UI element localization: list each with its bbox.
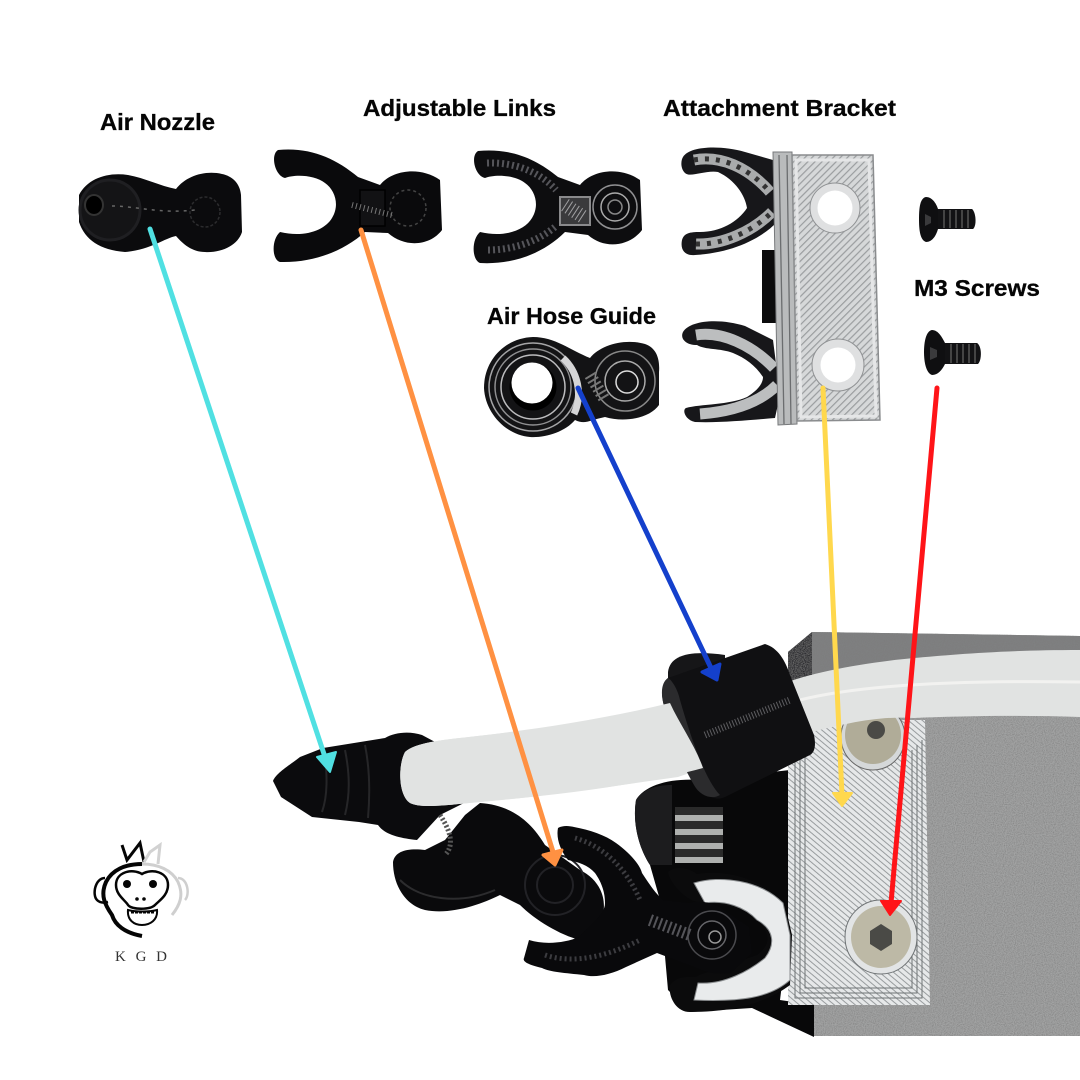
part: M3 screw top: [919, 197, 976, 242]
photo: assembled air nozzle on print head: [273, 632, 1080, 1037]
nozzle on hose: [273, 733, 470, 840]
part: adjustable link 2: [474, 150, 642, 263]
black housing behind bracket: [635, 653, 814, 1037]
gray toolhead block: [788, 632, 1080, 1036]
part: air hose guide: [484, 337, 659, 437]
hose guide ring: [400, 644, 815, 806]
logo wordmark: K G D: [115, 949, 167, 965]
part: M3 screw bottom: [924, 330, 981, 375]
KGD monkey logo: [95, 843, 188, 965]
arrow: air nozzle (cyan): [150, 229, 336, 772]
bolt lower: [845, 900, 917, 974]
bracket fork in white: [668, 868, 792, 1012]
heading: Air Nozzle: Air Nozzle: [100, 109, 215, 135]
crown: [122, 843, 160, 864]
lower link 1: [393, 803, 604, 940]
silicone air hose: [400, 650, 1080, 806]
heading: Air Hose Guide: Air Hose Guide: [487, 303, 656, 329]
arrow: attachment bracket (yellow): [823, 388, 852, 806]
arrow: adjustable links (orange): [361, 230, 562, 865]
heading: Adjustable Links: Adjustable Links: [363, 95, 556, 121]
part: adjustable link 1: [274, 150, 442, 262]
bolt upper: [841, 704, 905, 770]
monkey face: [95, 864, 188, 936]
silver bracket plate on block: [788, 720, 930, 1005]
arrow: M3 screws (red): [881, 388, 937, 915]
heading: Attachment Bracket: Attachment Bracket: [663, 95, 896, 121]
heading: M3 Screws: M3 Screws: [914, 275, 1040, 301]
lower link 2: [524, 826, 752, 976]
arrow: air hose guide (blue): [578, 388, 720, 680]
part: attachment bracket: [681, 148, 880, 425]
part: air nozzle: [79, 173, 242, 252]
